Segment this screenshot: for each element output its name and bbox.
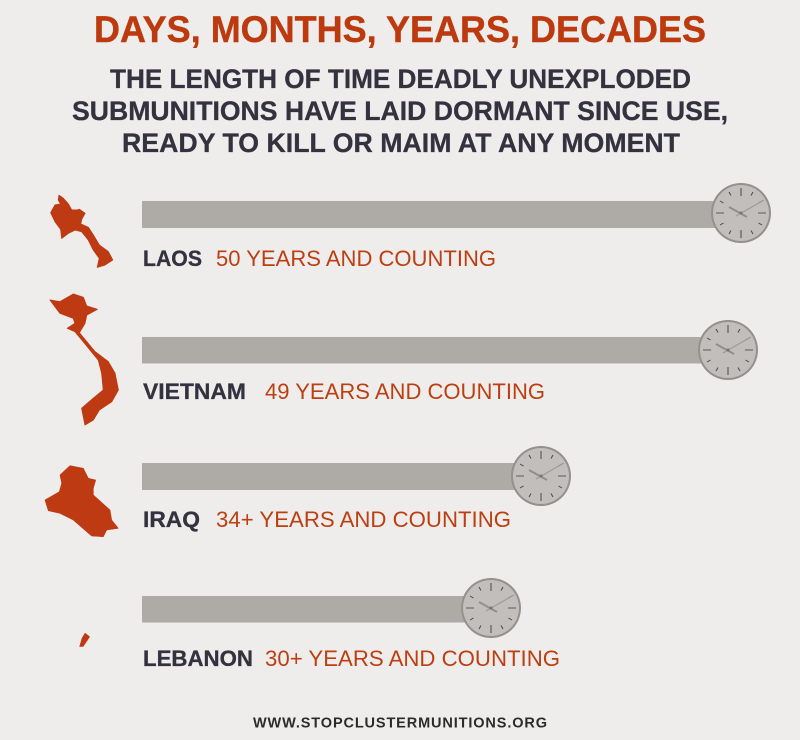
label: Laos years: 50 YEARS AND COUNTING (216, 246, 496, 271)
subtitle: SUBMUNITIONS HAVE LAID DORMANT SINCE USE, (72, 96, 728, 126)
panel: Iraq row (45, 446, 571, 537)
subtitle: THE LENGTH OF TIME DEADLY UNEXPLODED (110, 64, 691, 94)
label: Vietnam: VIETNAM (143, 379, 246, 404)
label: Iraq years: 34+ YEARS AND COUNTING (216, 507, 511, 532)
source URL: WWW.STOPCLUSTERMUNITIONS.ORG (253, 716, 547, 732)
subtitle (72, 64, 728, 158)
icon: map of Iraq (45, 466, 118, 537)
panel: Vietnam row (50, 294, 758, 425)
icon: clock (511, 446, 571, 506)
bar: Lebanon duration (142, 596, 467, 622)
label: Laos: LAOS (143, 246, 202, 271)
icon: clock (711, 183, 771, 243)
icon: map of Laos (51, 195, 113, 267)
title: DAYS, MONTHS, YEARS, DECADES (94, 9, 706, 50)
panel: Lebanon row (79, 578, 560, 671)
subtitle: READY TO KILL OR MAIM AT ANY MOMENT (122, 128, 680, 158)
bar: Iraq duration (142, 463, 517, 490)
label: Lebanon: LEBANON (143, 646, 253, 671)
bar: Laos duration (142, 201, 717, 228)
label: Vietnam years: 49 YEARS AND COUNTING (265, 379, 545, 404)
panel: Laos row (51, 183, 771, 271)
icon: map of Lebanon (79, 633, 90, 647)
icon: clock (698, 320, 758, 380)
bar: Vietnam duration (142, 337, 704, 364)
label: Iraq: IRAQ (143, 507, 200, 532)
icon: map of Vietnam (50, 294, 118, 425)
label: Lebanon years: 30+ YEARS AND COUNTING (265, 646, 560, 671)
icon: clock (461, 578, 521, 638)
